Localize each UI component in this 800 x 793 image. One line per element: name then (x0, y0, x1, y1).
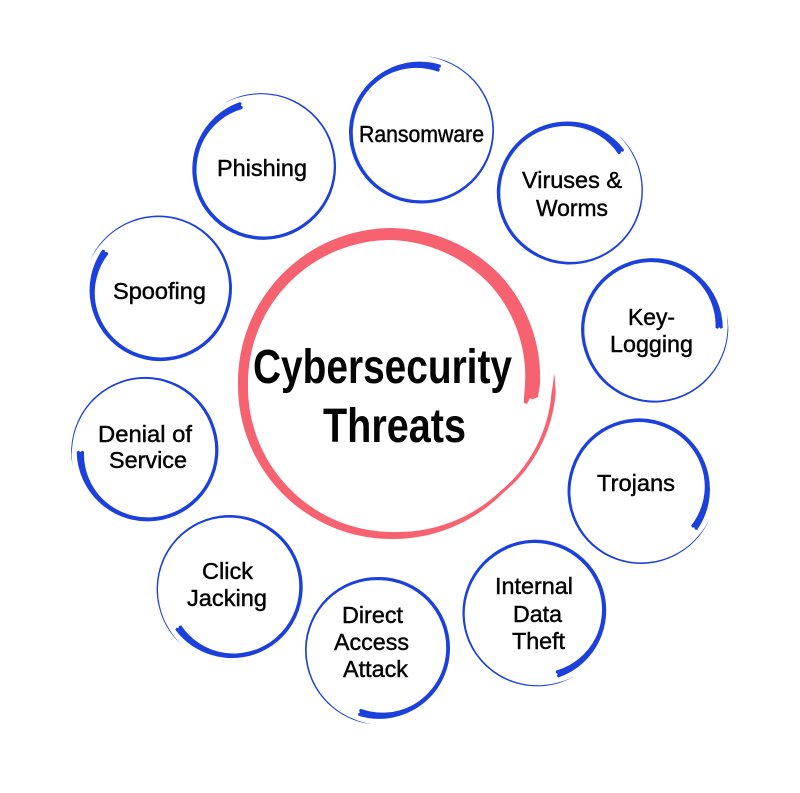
label: Direct (342, 602, 404, 628)
heading: Cybersecurity Threats (253, 341, 512, 453)
panel: Trojans (549, 400, 733, 583)
label: Internal (495, 573, 573, 599)
heading: Cybersecurity Threats: Threats (323, 400, 466, 453)
label: Service (109, 447, 187, 473)
label: Denial of (98, 421, 193, 447)
ring (66, 196, 251, 380)
panel: Viruses & Worms (469, 89, 672, 293)
central red ring (238, 228, 556, 539)
ring (161, 64, 365, 268)
panel: Click Jacking (127, 486, 331, 690)
label: Logging (610, 331, 693, 357)
panel: Spoofing (66, 196, 251, 380)
panel: Internal Data Theft (434, 511, 637, 716)
ring (563, 238, 747, 421)
ring (549, 400, 733, 583)
panel: Ransomware (349, 56, 494, 204)
ring (349, 56, 494, 204)
label: Viruses & (522, 167, 622, 193)
panel: Denial of Service (52, 358, 237, 541)
ring (52, 358, 237, 541)
label: Theft (512, 628, 566, 654)
ring (305, 577, 450, 724)
label (187, 558, 267, 611)
label: Access (334, 629, 409, 655)
heading: Cybersecurity Threats: Cybersecurity (253, 341, 512, 394)
label (495, 573, 573, 654)
label: Ransomware (359, 121, 484, 147)
label: Attack (343, 656, 408, 682)
panel: Direct Access Attack (305, 577, 450, 724)
panel: Phishing (161, 64, 365, 268)
panel: Key-Logging (563, 238, 747, 421)
label: Jacking (187, 585, 267, 611)
ring (469, 89, 672, 293)
label: Spoofing (113, 278, 206, 304)
label (334, 602, 409, 682)
label: Phishing (217, 155, 307, 181)
label (610, 304, 693, 357)
label: Trojans (597, 470, 675, 496)
ring (434, 511, 637, 716)
label: Data (513, 601, 562, 627)
label: Click (202, 558, 253, 584)
label (98, 421, 193, 473)
label: Key- (628, 304, 675, 330)
ring (127, 486, 331, 690)
label: Worms (536, 195, 608, 221)
panel: central Cybersecurity Threats (238, 228, 556, 539)
label (522, 167, 622, 221)
